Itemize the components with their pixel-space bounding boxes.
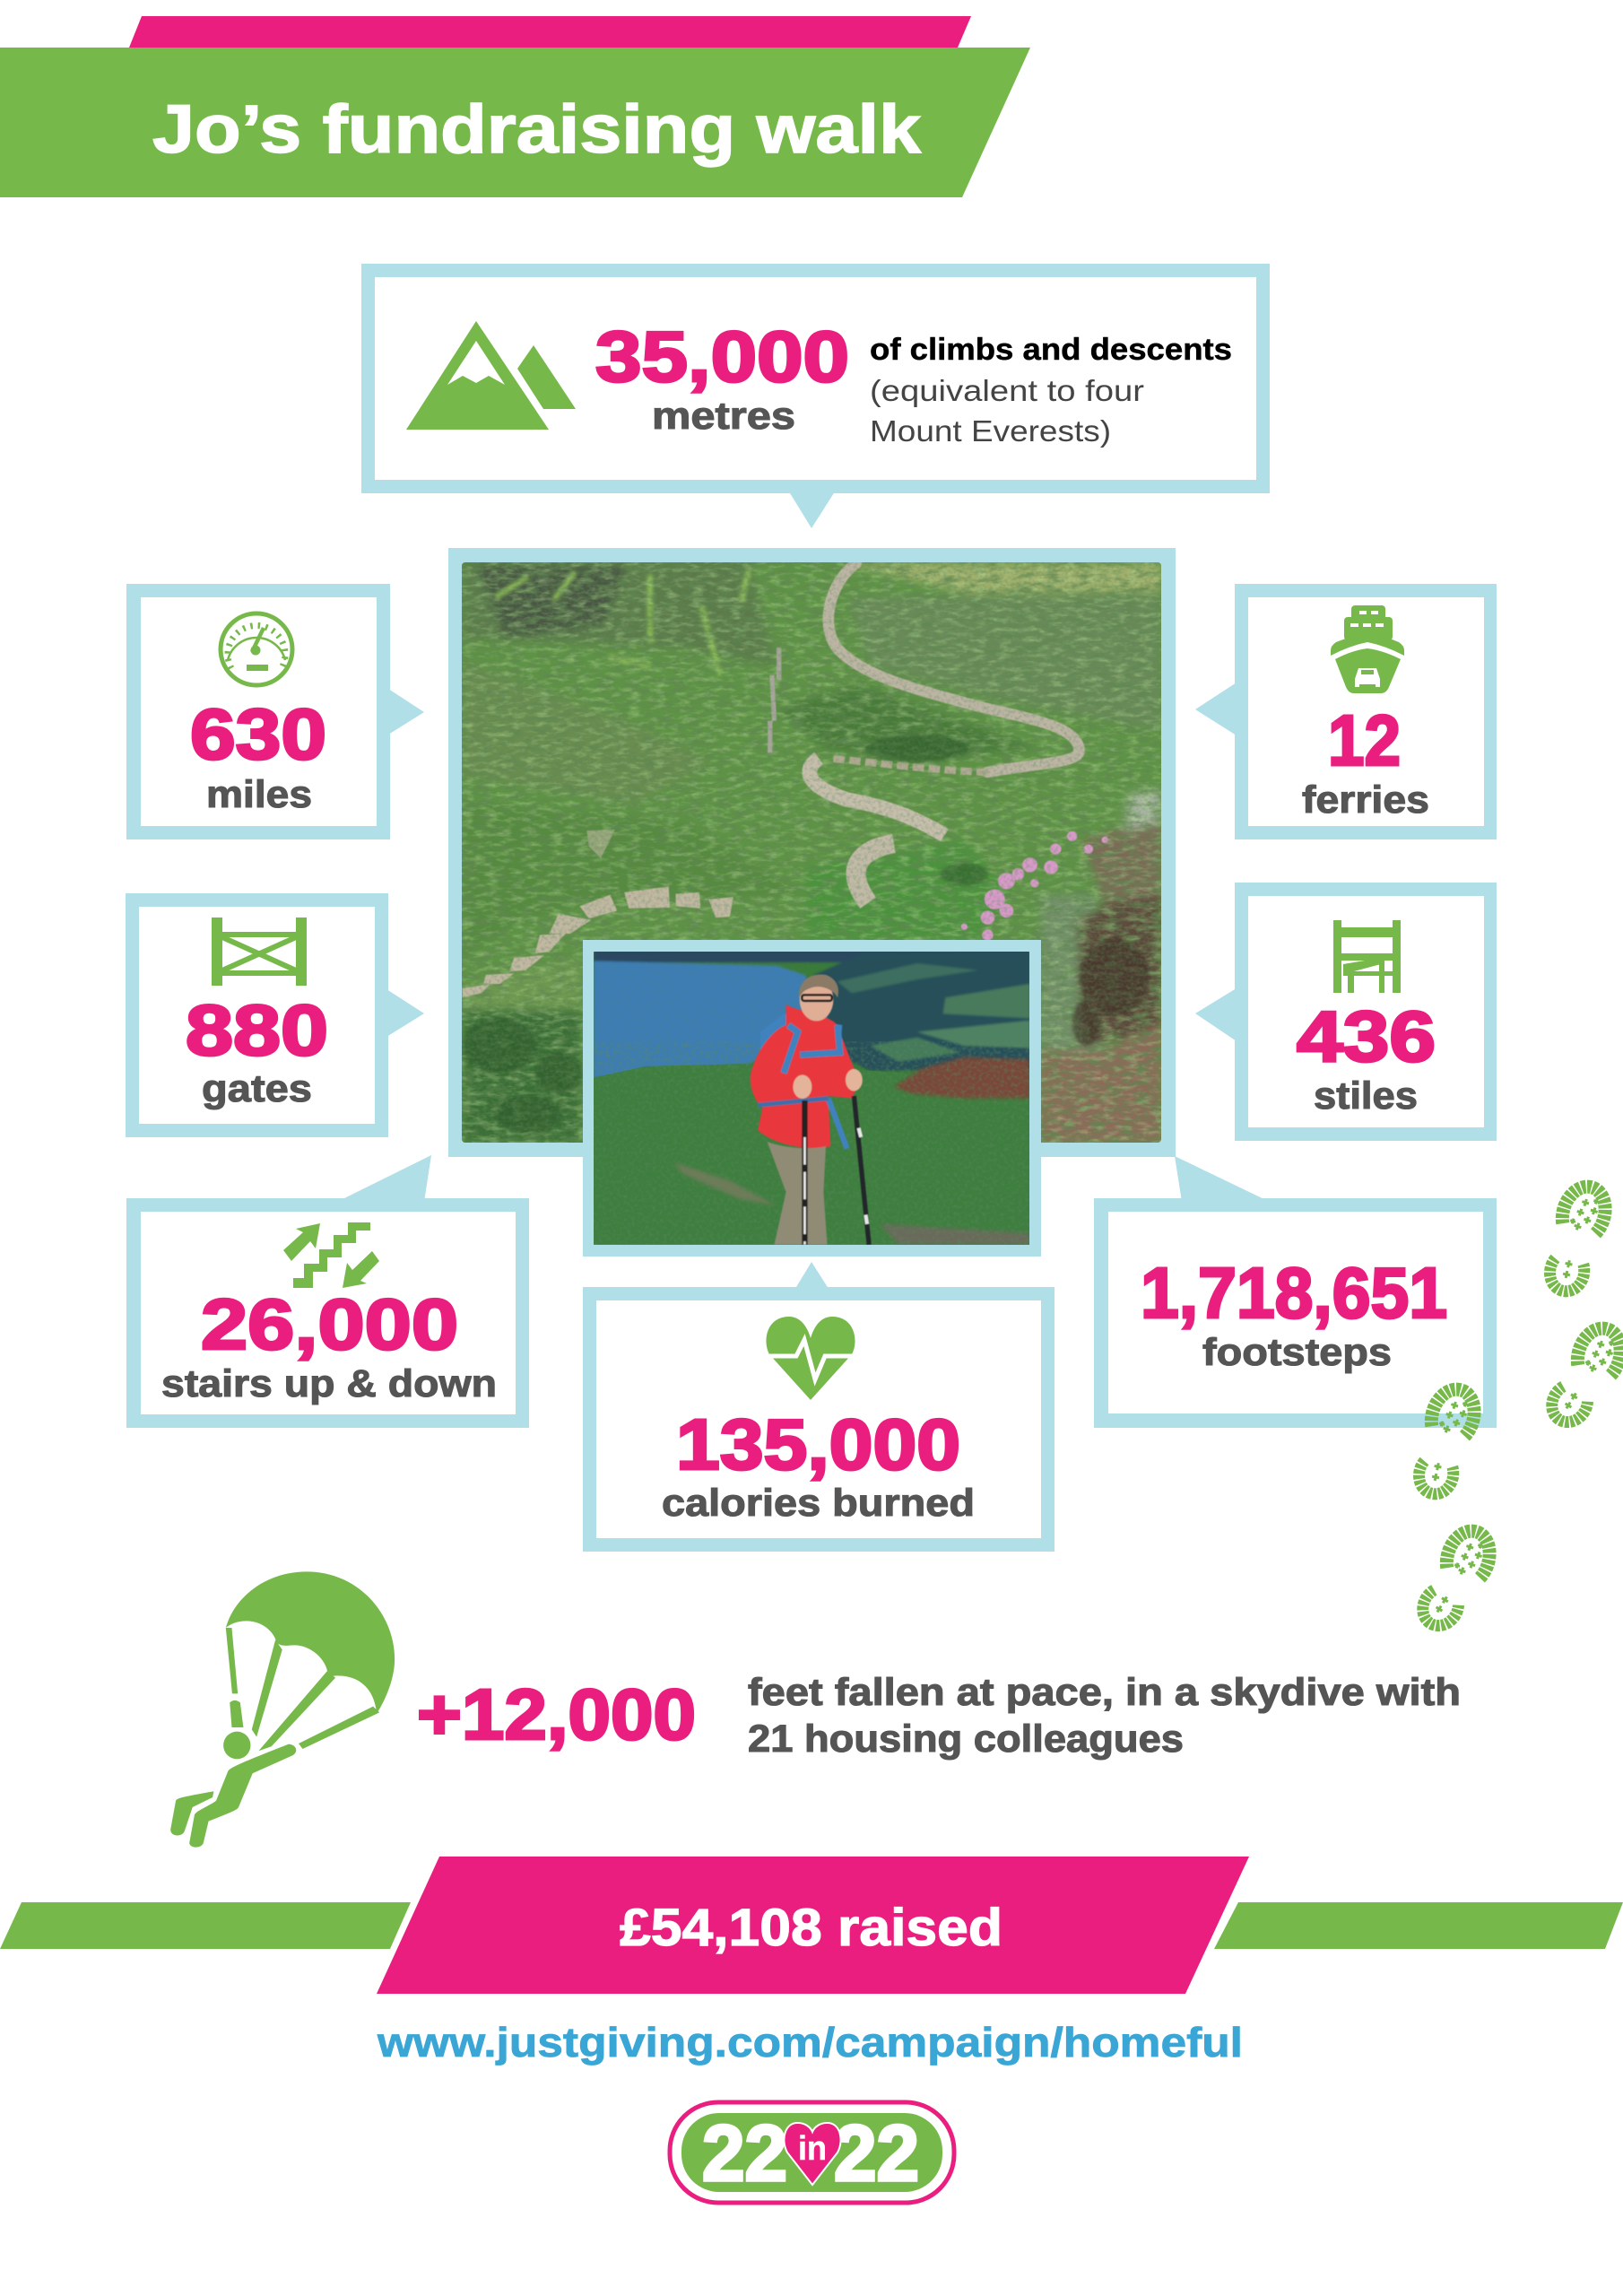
banner: amount raised: £54,108 raised: [620, 1899, 1002, 1957]
panel: footsteps: footsteps: [1202, 1331, 1392, 1374]
hands: [793, 1075, 812, 1099]
panel: miles: miles: [206, 773, 312, 816]
footprint 1: [1546, 1181, 1612, 1294]
panel: ferries: 12: [1328, 700, 1401, 780]
icon: speedometer: [221, 613, 292, 685]
stat: 35,000 metres: [595, 317, 849, 438]
text: climbs description: (equivalent to four: [870, 374, 1144, 407]
photo: coastal path with steps: [448, 548, 1176, 1157]
footprint 2: [1545, 1323, 1623, 1429]
panel: stiles: 436: [1297, 996, 1436, 1076]
poles: [802, 1100, 809, 1245]
backpack: [759, 1013, 843, 1050]
url: www.justgiving.com/campaign/homeful: [377, 2019, 1243, 2066]
panel: stiles: [1195, 883, 1497, 1141]
panel: gates: [126, 893, 424, 1137]
trousers: [768, 1142, 828, 1245]
text: climbs description: of climbs and descents: [870, 333, 1232, 367]
panel: ferries: [1195, 584, 1497, 839]
panel: ferries: ferries: [1302, 778, 1429, 822]
text: climbs description: Mount Everests): [870, 414, 1111, 448]
panel: stairs: stairs up & down: [161, 1362, 497, 1405]
icon: heart with pulse: [762, 1317, 859, 1400]
photo: Jo with walking poles: [583, 940, 1041, 1257]
title banner: Jo’s fundraising walk: [152, 91, 922, 168]
stat: skydive height: +12,000: [417, 1674, 696, 1754]
stat: 35,000 metres: 35,000: [595, 317, 849, 396]
panel: calories: calories burned: [662, 1482, 975, 1525]
panel: calories: [583, 1262, 1055, 1552]
icon: skydiver with parachute: [170, 1571, 395, 1848]
fence post: [770, 648, 779, 753]
panel: climbs and descents: [361, 264, 1270, 528]
footprint 4: [1416, 1526, 1497, 1632]
trail: [463, 563, 1079, 997]
panel: miles: 630: [190, 694, 326, 774]
logo: 22 in 22: in: [798, 2130, 827, 2168]
panel: footsteps: [1094, 1156, 1497, 1428]
panel: stairs: [126, 1155, 529, 1428]
title banner: [0, 16, 1030, 197]
panel: calories: 135,000: [676, 1405, 960, 1484]
icon: gate: [212, 918, 307, 986]
banner: amount raised: [0, 1857, 1623, 1994]
text: skydive description: feet fallen at pace, in a skydive with: [748, 1671, 1461, 1714]
panel: gates: 880: [186, 990, 328, 1070]
flowers: [961, 831, 1108, 941]
text: skydive description: 21 housing colleagues: [748, 1718, 1184, 1761]
logo: 22 in 22: 22: [834, 2109, 919, 2197]
logo: 22 in 22: [670, 2102, 954, 2203]
icon: mountains: [406, 321, 576, 430]
panel: miles: [126, 584, 424, 839]
icon: stile: [1333, 920, 1401, 993]
stone steps: [463, 830, 733, 997]
footprint 3: [1415, 1384, 1481, 1497]
panel: stairs: 26,000: [201, 1284, 458, 1364]
text: skydive description: [748, 1671, 1461, 1761]
panel: footsteps: 1,718,651: [1141, 1253, 1447, 1333]
text: climbs description: [870, 333, 1232, 448]
footprints: [1415, 1181, 1623, 1632]
head: [800, 978, 833, 1021]
icon: car ferry: [1331, 605, 1404, 693]
logo: 22 in 22: 22: [702, 2109, 787, 2197]
icon: stairs with arrows: [283, 1222, 379, 1288]
stat: 35,000 metres: metres: [652, 395, 795, 438]
panel: stiles: stiles: [1314, 1074, 1418, 1118]
panel: gates: gates: [202, 1067, 312, 1110]
jacket: [751, 1004, 861, 1148]
